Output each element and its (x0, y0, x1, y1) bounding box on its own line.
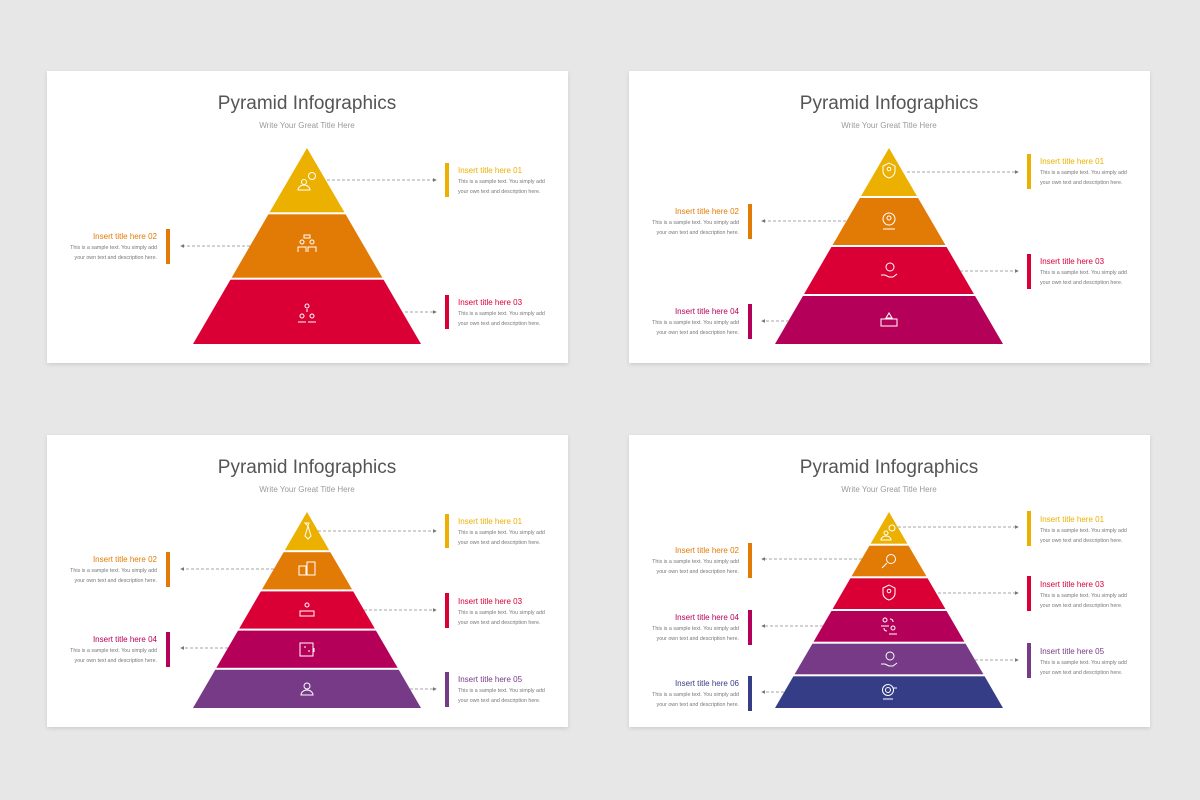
arrows (181, 531, 436, 689)
pyramid (770, 512, 1008, 708)
panel: card 1 (3 tiers) (47, 71, 568, 363)
callout 02 (70, 552, 170, 587)
callout 04: your own text and description here. (657, 330, 739, 336)
callout 05: This is a sample text. You simply add (458, 688, 545, 694)
callout 01 (1027, 154, 1127, 189)
callout 04: Insert title here 04 (93, 635, 158, 644)
callout 01: This is a sample text. You simply add (458, 179, 545, 185)
callout 01: Insert title here 01 (458, 517, 523, 526)
callout 03 (445, 593, 545, 628)
callout 02: Insert title here 02 (93, 555, 158, 564)
title: Pyramid Infographics (800, 93, 978, 114)
callout 04: This is a sample text. You simply add (652, 320, 739, 326)
callout 03: Insert title here 03 (1040, 580, 1105, 589)
icon: team (300, 603, 314, 616)
callout 04: This is a sample text. You simply add (70, 648, 157, 654)
callout 06: Insert title here 06 (675, 679, 740, 688)
callout 02: your own text and description here. (75, 255, 157, 261)
icon: device (881, 313, 897, 326)
callout 02: This is a sample text. You simply add (70, 245, 157, 251)
callout 04 (70, 632, 170, 667)
callout 04: Insert title here 04 (675, 307, 740, 316)
pyramid (770, 148, 1008, 344)
icon: tie (305, 523, 311, 539)
icon: shield user (883, 585, 895, 600)
callout 01: Insert title here 01 (1040, 515, 1105, 524)
callout 03: your own text and description here. (1040, 603, 1122, 609)
callout 02: Insert title here 02 (675, 546, 740, 555)
callout 02: your own text and description here. (657, 230, 739, 236)
arrows (762, 172, 1018, 321)
icon: exchange users (881, 618, 897, 634)
subtitle: Write Your Great Title Here (259, 121, 355, 130)
icon: buildings (299, 562, 315, 575)
callout 02: your own text and description here. (75, 578, 157, 584)
callout 02 (70, 229, 170, 264)
callout 02: This is a sample text. You simply add (70, 568, 157, 574)
icon: money hand (881, 263, 897, 277)
callout 03: your own text and description here. (1040, 280, 1122, 286)
icon: person info (881, 525, 895, 540)
callout 01 (1027, 511, 1127, 546)
callout 02: This is a sample text. You simply add (652, 559, 739, 565)
subtitle: Write Your Great Title Here (841, 121, 937, 130)
callout 03: This is a sample text. You simply add (458, 311, 545, 317)
arrows (762, 527, 1018, 692)
callout 03: your own text and description here. (458, 620, 540, 626)
callout 01: This is a sample text. You simply add (1040, 528, 1127, 534)
pyramid (190, 148, 425, 344)
title: Pyramid Infographics (218, 93, 396, 114)
callout 01: your own text and description here. (458, 189, 540, 195)
callout 03: This is a sample text. You simply add (1040, 270, 1127, 276)
panel: card 3 (5 tiers) (47, 435, 568, 727)
pyramid (190, 512, 425, 708)
callout 02 (652, 204, 752, 239)
title: Pyramid Infographics (800, 457, 978, 478)
callout 05: your own text and description here. (1040, 670, 1122, 676)
callout 04 (652, 304, 752, 339)
icon: meeting (298, 235, 316, 252)
callout 06: your own text and description here. (657, 702, 739, 708)
callout 05: Insert title here 05 (1040, 647, 1105, 656)
icon: shield user (883, 163, 895, 178)
callout 01: Insert title here 01 (458, 166, 523, 175)
callout 01: your own text and description here. (458, 540, 540, 546)
callout 03 (1027, 576, 1127, 611)
callout 04: your own text and description here. (657, 636, 739, 642)
callout 03 (1027, 254, 1127, 289)
callout 06: This is a sample text. You simply add (652, 692, 739, 698)
callout 05 (1027, 643, 1127, 678)
callout 02: Insert title here 02 (93, 232, 158, 241)
icon: search user (882, 554, 896, 568)
callout 03: Insert title here 03 (458, 597, 523, 606)
subtitle: Write Your Great Title Here (259, 485, 355, 494)
callout 04: This is a sample text. You simply add (652, 626, 739, 632)
icon: person question (298, 172, 316, 190)
callout 01: your own text and description here. (1040, 538, 1122, 544)
callout 03 (445, 295, 545, 329)
title: Pyramid Infographics (218, 457, 396, 478)
panel: card 2 (4 tiers) (629, 71, 1150, 363)
callout 01: Insert title here 01 (1040, 157, 1105, 166)
callout 02: This is a sample text. You simply add (652, 220, 739, 226)
icon: hierarchy (298, 304, 316, 322)
subtitle: Write Your Great Title Here (841, 485, 937, 494)
callout 03: This is a sample text. You simply add (1040, 593, 1127, 599)
callout 05: your own text and description here. (458, 698, 540, 704)
callout 01 (445, 163, 545, 197)
icon: support person (301, 683, 313, 695)
panel: card 4 (6 tiers) (629, 435, 1150, 727)
icon: money hand (881, 652, 897, 666)
callout 02: your own text and description here. (657, 569, 739, 575)
callout 01: your own text and description here. (1040, 180, 1122, 186)
callout 05 (445, 672, 545, 707)
callout 03: your own text and description here. (458, 321, 540, 327)
callout 02 (652, 543, 752, 578)
callout 06 (652, 676, 752, 711)
icon: target user (883, 213, 895, 229)
callout 03: Insert title here 03 (1040, 257, 1105, 266)
callout 04: your own text and description here. (75, 658, 157, 664)
callout 03: Insert title here 03 (458, 298, 523, 307)
callout 04: Insert title here 04 (675, 613, 740, 622)
icon: board (300, 643, 314, 656)
arrows (181, 180, 436, 312)
callout 05: This is a sample text. You simply add (1040, 660, 1127, 666)
callout 04 (652, 610, 752, 645)
callout 02: Insert title here 02 (675, 207, 740, 216)
callout 05: Insert title here 05 (458, 675, 523, 684)
callout 01: This is a sample text. You simply add (1040, 170, 1127, 176)
callout 03: This is a sample text. You simply add (458, 610, 545, 616)
icon: target (882, 684, 897, 699)
callout 01 (445, 514, 545, 548)
callout 01: This is a sample text. You simply add (458, 530, 545, 536)
